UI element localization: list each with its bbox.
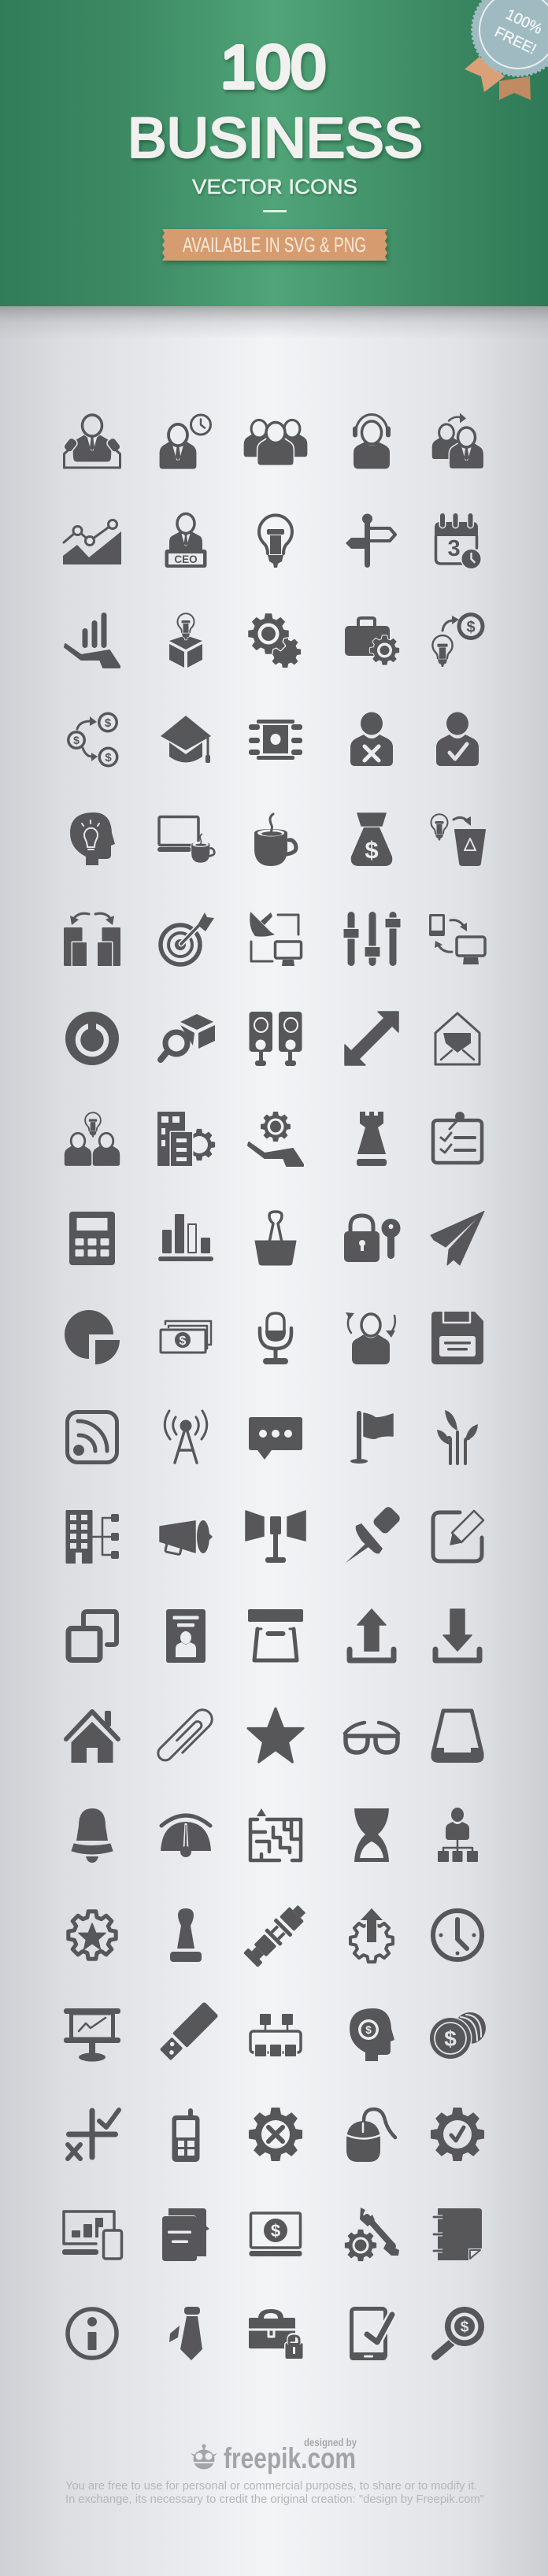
icon: magnifier on cube [161, 1014, 215, 1060]
icon: graduation cap [161, 716, 211, 763]
icon: person with headset [353, 414, 391, 469]
icon: CEO: CEO [174, 553, 198, 565]
icon: paperclip [155, 1706, 216, 1767]
icon: in tray [432, 1711, 483, 1763]
icon: bulb in box [169, 613, 202, 668]
icon: megaphone [160, 1520, 213, 1555]
subheading: VECTOR ICONS: VECTOR ICONS [192, 175, 357, 198]
icon: shared idea [65, 1112, 120, 1166]
icon: microphone [260, 1313, 291, 1364]
icon: glasses [345, 1723, 398, 1752]
icon: RSS feed [68, 1412, 117, 1463]
icon: phone to monitor sync [429, 914, 485, 964]
icon: star [248, 1708, 303, 1762]
icon: documents [162, 2208, 209, 2261]
text: freepik.com: freepik.com [224, 2442, 356, 2474]
icon: diagonal resize arrow [345, 1012, 398, 1065]
icon: bar chart [158, 1214, 213, 1261]
icon: banknotes [161, 1321, 211, 1353]
tape text: AVAILABLE IN SVG & PNG [183, 233, 366, 257]
icon: copy pages [68, 1612, 117, 1660]
icon: money exchange [67, 712, 118, 767]
icon: magnifier with dollar [435, 2307, 484, 2356]
icon: flag [350, 1411, 393, 1464]
icon: sliders [343, 912, 400, 966]
icon: antenna tower [165, 1411, 207, 1463]
icon: computer mouse [346, 2109, 395, 2162]
icon: switching blocks [64, 913, 120, 966]
icon: wall clock [433, 1911, 482, 1960]
icon: banknotes: $ [180, 1334, 187, 1348]
icon: padlock and key [344, 1216, 400, 1262]
icon: calendar with clock [435, 513, 480, 568]
text: licence note: You are free to use for personal or commercial purposes, to share or to modify it. [65, 2480, 477, 2493]
icon: gear with cross [249, 2108, 302, 2161]
icon: CEO [165, 513, 206, 568]
icon: storage box [248, 1609, 303, 1660]
icon: direction banners [246, 1511, 305, 1563]
icon: money bag: $ [365, 836, 379, 864]
icon: briefcase with lock [249, 2309, 302, 2359]
icon: information [68, 2309, 117, 2358]
icon: calendar with clock: 3 [447, 536, 461, 561]
icon: manager hierarchy [438, 1808, 478, 1862]
icon: open envelope [435, 1013, 480, 1064]
icon: bulb to dollar [432, 613, 485, 667]
icon: checklist board [433, 1112, 482, 1163]
icon: presentation board [64, 2008, 120, 2061]
icon: power button [65, 1012, 119, 1065]
icon: plant sprouts [437, 1410, 478, 1464]
icon: company with gear [157, 1112, 215, 1166]
icon grid [62, 413, 486, 2360]
icon: mobile with check [350, 2308, 392, 2360]
icon: bulb to dollar: $ [466, 619, 476, 636]
icon: ID card [166, 1609, 206, 1663]
icon: team of three [244, 420, 307, 465]
icon: two persons swap [432, 413, 483, 468]
icon: building hierarchy [66, 1510, 119, 1564]
icon: coin stack: $ [444, 2026, 457, 2051]
text: licence note [65, 2480, 484, 2506]
icon: money exchange: $ [73, 734, 80, 746]
icon: wrench and gear [345, 2208, 399, 2261]
icon: gear with star [68, 1912, 116, 1959]
badge text: FREE! [492, 24, 539, 58]
text: licence note: In exchange, its necessary to credit the original creation: "design by Freepik.com" [65, 2493, 484, 2506]
icon: network nodes [250, 2014, 301, 2056]
icon: bell [72, 1808, 113, 1863]
heading: BUSINESS: BUSINESS [128, 107, 423, 170]
icon: mobile phone [172, 2108, 200, 2162]
panel: header banner [0, 0, 548, 339]
icon: person with rotation arrows [346, 1312, 395, 1364]
icon: money exchange: $ [105, 716, 112, 730]
badge text: 100% [503, 6, 545, 38]
icon: idea to recycle bin [431, 814, 485, 865]
icon: gear on hand [248, 1112, 303, 1166]
icon: person rejected [350, 712, 393, 766]
heading: 100: 100 [220, 33, 326, 101]
icon: money bag [351, 813, 392, 866]
icon: magnifier with dollar: $ [461, 2319, 469, 2335]
icon: decision cross [66, 2108, 119, 2160]
icon: person approved [436, 712, 479, 766]
badge text [492, 6, 545, 58]
icon: laptop with dollar: $ [271, 2221, 280, 2241]
icon: dish to monitor [250, 912, 301, 966]
icon: light bulb [259, 515, 292, 568]
icon: money exchange: $ [105, 751, 112, 764]
icon: plug connector [243, 1901, 310, 1968]
icon: gear with check [431, 2108, 484, 2161]
icon: hand with bars [65, 613, 120, 668]
icon: signpost [346, 513, 395, 568]
icon: target with arrow [161, 912, 214, 964]
icon: coffee cup [254, 814, 296, 866]
icon: microchip [249, 720, 302, 760]
icon: calculator [69, 1212, 115, 1265]
icon: head with dollar: $ [365, 2024, 372, 2036]
icon: necktie [169, 2307, 202, 2360]
icon: laptop with coffee [157, 817, 214, 863]
icon: laptop with dollar [249, 2213, 302, 2256]
icon: hourglass [354, 1808, 389, 1862]
icon: upload [350, 1609, 394, 1660]
icon: double gears [248, 613, 301, 668]
icon: download [435, 1609, 480, 1660]
icon: head with dollar [350, 2008, 394, 2061]
icon: chat bubble [249, 1417, 302, 1460]
icon: head with idea [70, 812, 115, 865]
icon: speedometer [161, 1815, 211, 1857]
icon: house [66, 1711, 118, 1763]
icon: gear with up arrow [350, 1908, 393, 1962]
icon: chess rook [357, 1112, 387, 1166]
icon: rubber stamp [170, 1908, 202, 1962]
icon: freepik mascot [191, 2444, 217, 2469]
icon: spiral notebook [434, 2208, 482, 2260]
icon: pie chart [65, 1310, 120, 1364]
badge: 100% free ribbon [465, 0, 548, 100]
icon: coin stack [430, 2012, 486, 2059]
icon: growth chart [63, 520, 121, 564]
icon: binder clip [255, 1212, 296, 1265]
icon: speaker at podium [63, 415, 121, 468]
icon: speakers [249, 1012, 302, 1066]
icon: USB stick [158, 2001, 219, 2062]
icon: floppy disk [431, 1312, 483, 1364]
icon: paper plane [431, 1211, 484, 1265]
icon: person with clock [160, 415, 211, 469]
divider dash [263, 210, 287, 213]
icon: briefcase with gear [345, 618, 399, 665]
text: designed by: designed by [304, 2437, 357, 2448]
icon: edit note [433, 1511, 483, 1561]
tape label [162, 229, 387, 261]
icon: maze [250, 1808, 301, 1860]
icon: multi-device chart [62, 2211, 121, 2259]
panel: footer credit [65, 2437, 484, 2506]
icon: push pin [345, 1505, 402, 1564]
